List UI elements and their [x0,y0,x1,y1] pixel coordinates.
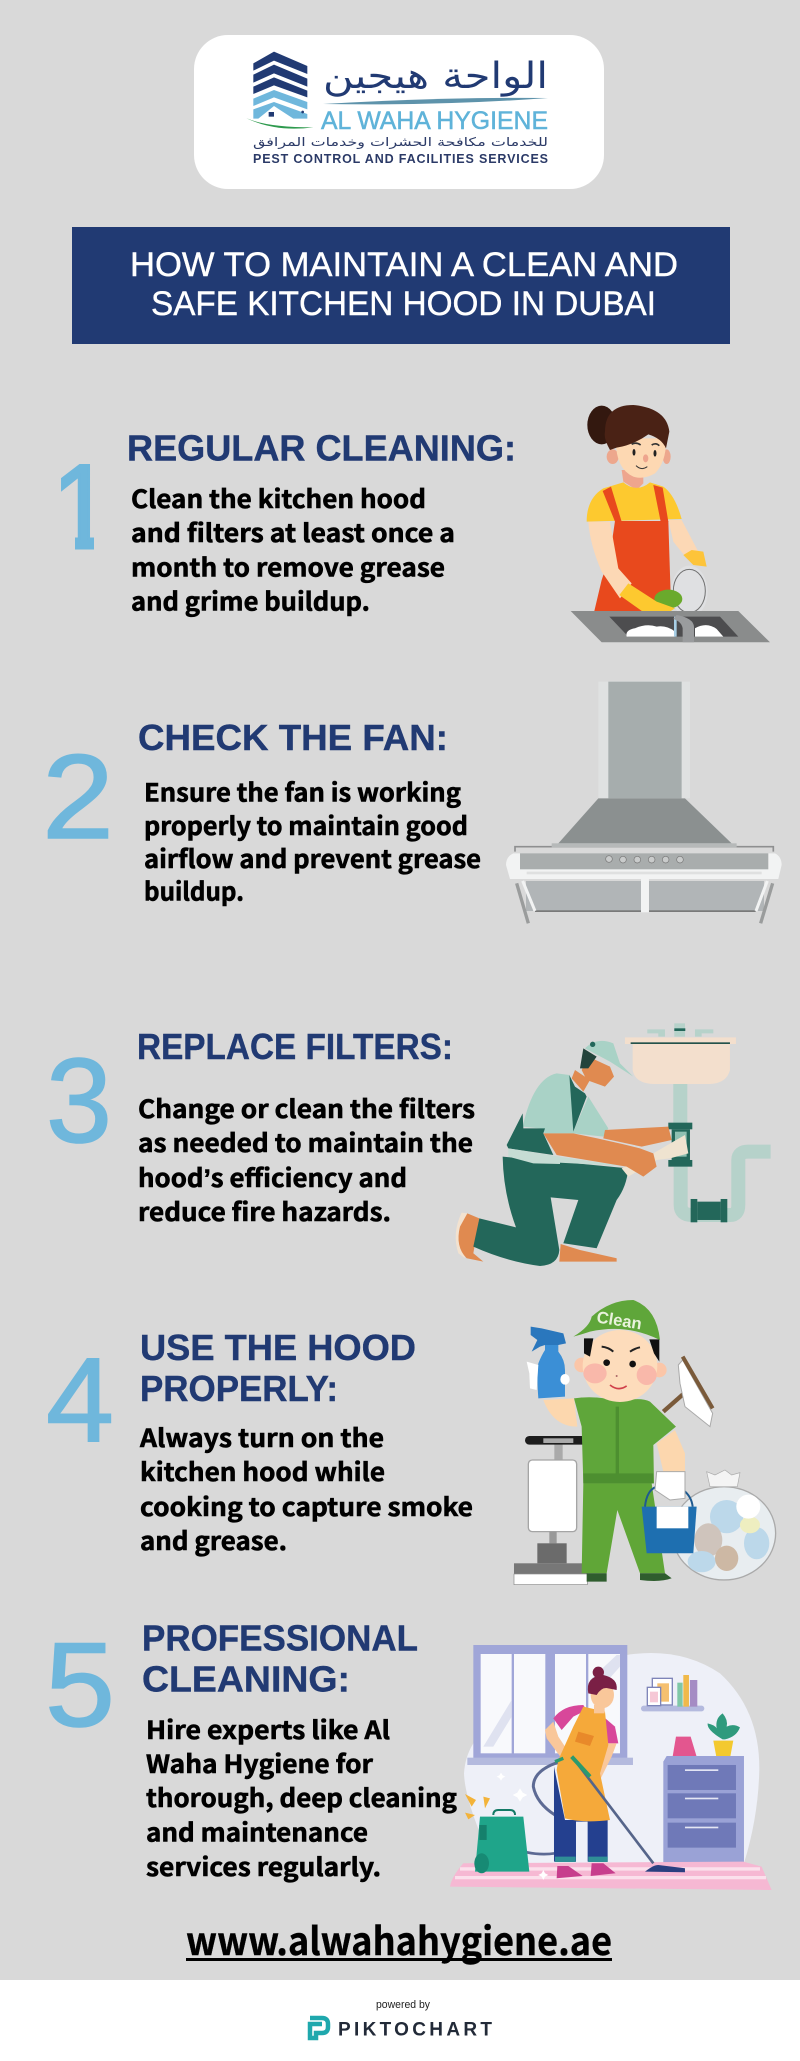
icon: kitchen hood [506,682,782,923]
title banner [72,227,730,344]
tagline: PEST CONTROL AND FACILITIES SERVICES [253,152,548,166]
divider swoosh [323,98,548,104]
heading [142,1618,418,1700]
heading: REGULAR CLEANING: [127,428,516,468]
heading: PROFESSIONAL [142,1618,418,1658]
panel: step 2 check the fan [42,682,782,923]
body text: as needed to maintain the [138,1124,473,1160]
body text: buildup. [144,872,244,908]
body text: services regularly. [146,1848,381,1884]
heading: USE THE HOOD [140,1327,416,1368]
body text: Change or clean the filters [138,1090,475,1126]
heading: CLEANING: [142,1658,350,1700]
body text [131,480,455,618]
body text: Waha Hygiene for [146,1745,373,1781]
heading: PROPERLY: [140,1368,338,1409]
heading [140,1327,416,1409]
panel: step 4 use the hood properly [46,1300,776,1585]
body text: Ensure the fan is working [144,774,461,810]
icon: cleaner with supplies: Clean [595,1308,643,1333]
body text: and grease. [140,1522,287,1558]
arabic name: الواحة هيجين [323,56,548,97]
powered by text: powered by [376,1999,430,2011]
body text: month to remove grease [131,548,445,584]
body text: airflow and prevent grease [144,840,481,876]
arabic tagline: للخدمات مكافحة الحشرات وخدمات المرافق [253,135,548,150]
website link: www.alwahahygiene.ae [186,1911,612,1966]
heading: CHECK THE FAN: [138,717,448,758]
company name: AL WAHA HYGIENE [321,107,548,135]
icon: cleaner with supplies [514,1300,776,1585]
body text [146,1711,457,1884]
body text: and grime buildup. [131,582,370,618]
panel: step 3 replace filters [46,1023,771,1266]
body text: hood’s efficiency and [138,1159,407,1195]
number 4: 4 [46,1333,114,1467]
body text: thorough, deep cleaning [146,1779,457,1815]
body text: kitchen hood while [140,1453,385,1489]
number 1: 1 [52,440,112,574]
number 2: 2 [42,730,114,864]
number 3: 3 [46,1034,112,1168]
body text [139,1419,473,1558]
body text: cooking to capture smoke [140,1488,473,1524]
icon: piktochart logo [310,2018,328,2038]
body text: Hire experts like Al [146,1711,390,1747]
icon: woman washing dishes [571,405,770,642]
icon: plumber fixing pipe [456,1023,771,1266]
body text [138,1090,475,1229]
body text [144,774,481,908]
icon: building logo [243,52,313,129]
icon: woman vacuuming room [450,1645,772,1890]
body text: and maintenance [146,1814,368,1850]
body text: reduce fire hazards. [138,1193,391,1229]
heading: REPLACE FILTERS: [137,1026,453,1067]
body text: and filters at least once a [131,514,455,550]
title banner: SAFE KITCHEN HOOD IN DUBAI [151,285,656,323]
body text: Always turn on the [139,1419,384,1455]
body text: Clean the kitchen hood [131,480,426,516]
footer [0,1980,800,2061]
piktochart wordmark: PIKTOCHART [338,2020,492,2040]
panel: step 5 professional cleaning [45,1618,772,1890]
body text: properly to maintain good [144,807,468,843]
title banner: HOW TO MAINTAIN A CLEAN AND [130,246,678,284]
logo card [194,35,604,189]
number 5: 5 [45,1618,115,1752]
panel: step 1 regular cleaning [52,405,770,642]
